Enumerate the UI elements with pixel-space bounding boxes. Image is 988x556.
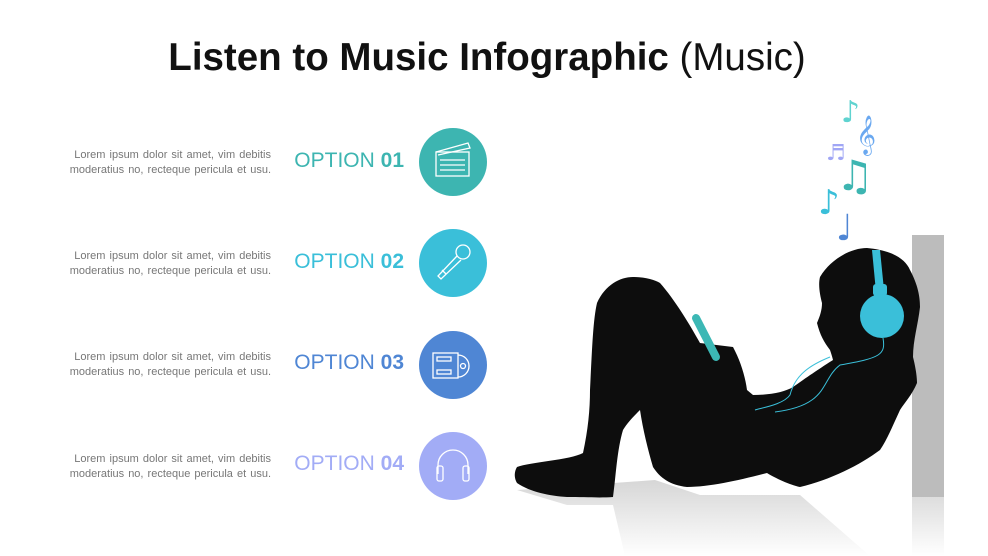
text block 1: Lorem ipsum dolor sit amet, vim debitis moderatius no, recteque pericula et usu.: [70, 149, 271, 176]
option label 1: OPTION 01: [294, 149, 404, 172]
option label 4: OPTION 04: [294, 452, 404, 475]
silhouette: person listening: [515, 248, 920, 497]
music notes: ♪: [818, 183, 840, 223]
music notes: ♫: [836, 151, 874, 200]
icon: microphone circle: [419, 229, 487, 297]
music notes: ♩: [836, 208, 853, 249]
floor reflection: [517, 480, 870, 556]
phone: [696, 318, 716, 357]
music notes: [818, 95, 876, 249]
music notes: ♬: [826, 141, 846, 166]
option label 3: OPTION 03: [294, 351, 404, 374]
icon: headphones circle: [419, 432, 487, 500]
headphones: [872, 250, 884, 292]
music notes: 𝄞: [856, 115, 876, 156]
music notes: ♪: [841, 95, 860, 130]
option label 2: OPTION 02: [294, 250, 404, 273]
text block 2: Lorem ipsum dolor sit amet, vim debitis moderatius no, recteque pericula et usu.: [70, 250, 271, 277]
icon: cd case circle: [419, 331, 487, 399]
icon: clapperboard circle: [419, 128, 487, 196]
text block 3: Lorem ipsum dolor sit amet, vim debitis moderatius no, recteque pericula et usu.: [70, 351, 271, 378]
title: Listen to Music Infographic (Music): [168, 36, 806, 79]
text block 4: Lorem ipsum dolor sit amet, vim debitis moderatius no, recteque pericula et usu.: [70, 453, 271, 480]
wall: [912, 235, 944, 556]
